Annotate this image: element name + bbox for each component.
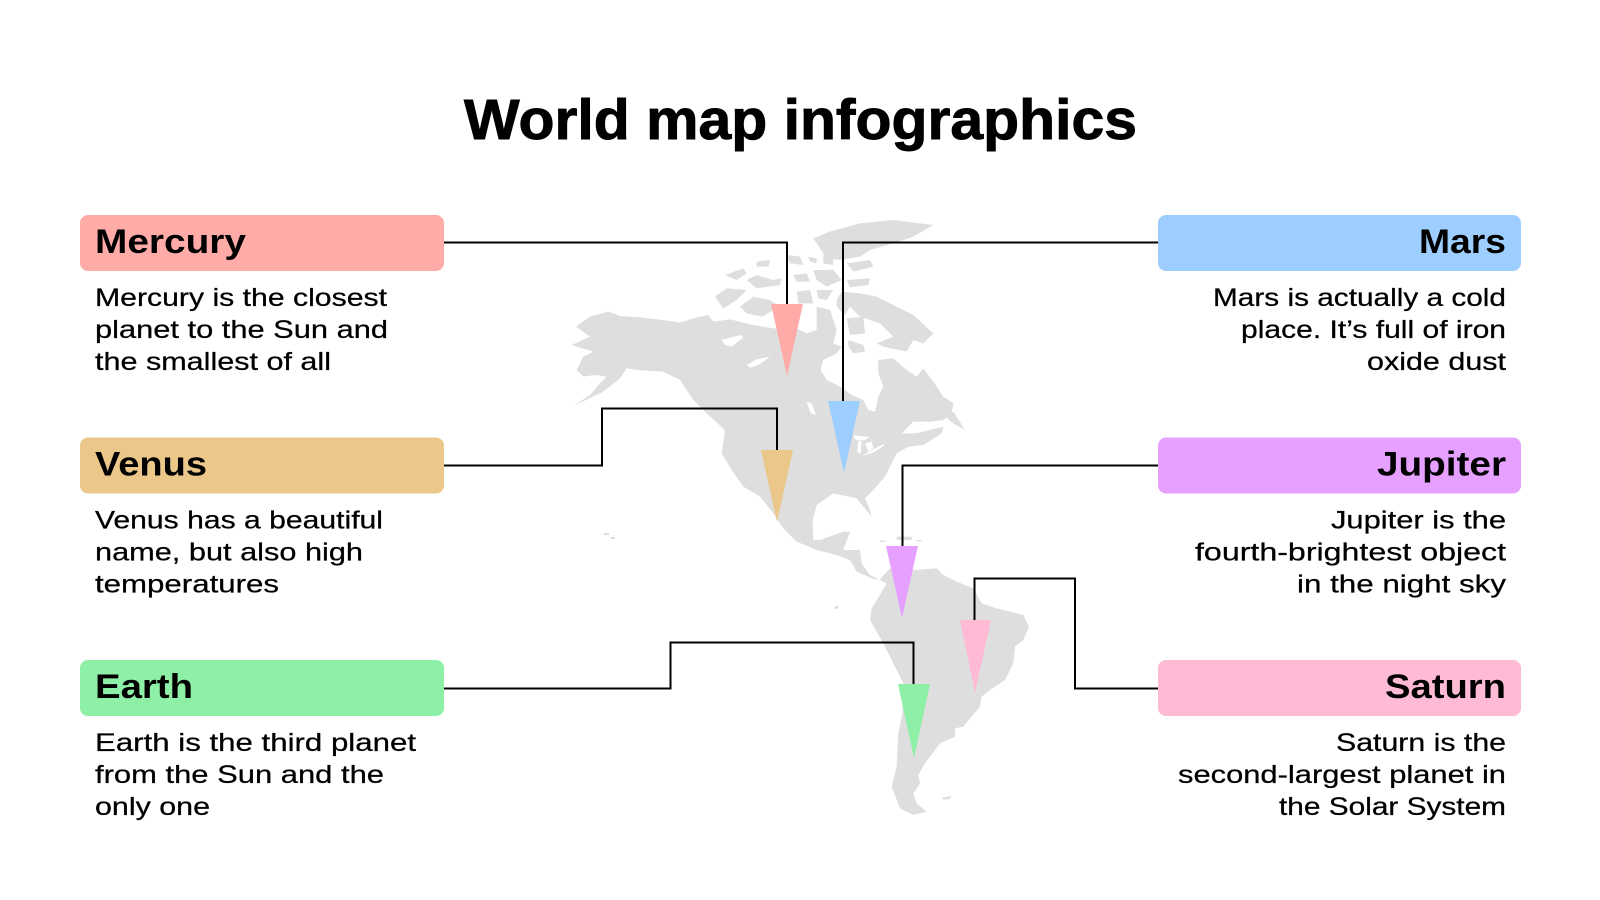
heading: Jupiter xyxy=(1377,446,1506,484)
connector: Jupiter xyxy=(902,466,1158,546)
marker: Earth xyxy=(898,684,930,758)
description: place. It’s full of iron xyxy=(1241,316,1506,344)
description: Jupiter is the xyxy=(1331,506,1506,534)
description xyxy=(95,729,416,821)
lakes and inland water xyxy=(722,335,885,456)
panel: Saturn xyxy=(1158,660,1521,821)
description: oxide dust xyxy=(1367,348,1506,376)
panel: Mars xyxy=(1158,215,1521,376)
title: World map infographics xyxy=(464,88,1137,152)
description xyxy=(1178,729,1506,821)
label bar xyxy=(80,660,444,716)
description: Venus has a beautiful xyxy=(95,506,383,534)
description: fourth-brightest object xyxy=(1195,538,1506,566)
description: Mars is actually a cold xyxy=(1213,284,1506,312)
description xyxy=(95,284,388,376)
description: in the night sky xyxy=(1297,570,1507,598)
description: Earth is the third planet xyxy=(95,729,416,757)
description: planet to the Sun and xyxy=(95,316,388,344)
marker: Saturn xyxy=(960,620,991,693)
description xyxy=(95,506,383,598)
panel: Mercury xyxy=(80,215,444,376)
marker: Mercury xyxy=(771,304,803,376)
connector: Mercury xyxy=(444,242,787,304)
description: the Solar System xyxy=(1279,793,1506,821)
marker: Venus xyxy=(761,450,793,522)
North America xyxy=(572,220,965,580)
label bar xyxy=(80,438,444,494)
South America and Caribbean xyxy=(870,537,1029,815)
map: North and South America xyxy=(572,220,1029,815)
marker: Mars xyxy=(828,401,860,473)
panel: Jupiter xyxy=(1158,438,1521,598)
connector: Venus xyxy=(444,408,777,466)
heading: Mercury xyxy=(95,223,246,261)
description: only one xyxy=(95,793,210,821)
description: Saturn is the xyxy=(1336,729,1506,757)
heading: Earth xyxy=(95,668,193,706)
label bar xyxy=(80,215,444,271)
description xyxy=(1195,506,1507,598)
label bar xyxy=(1158,215,1521,271)
connector: Saturn xyxy=(974,578,1158,688)
heading: Mars xyxy=(1419,223,1506,261)
description: Mercury is the closest xyxy=(95,284,387,312)
description: second-largest planet in xyxy=(1178,761,1506,789)
panel: Venus xyxy=(80,438,444,598)
description: temperatures xyxy=(95,570,279,598)
connector: Earth xyxy=(444,642,914,688)
label bar xyxy=(1158,438,1521,494)
marker: Jupiter xyxy=(886,546,918,618)
Pacific islands xyxy=(604,533,838,609)
description: from the Sun and the xyxy=(95,761,384,789)
panel: Earth xyxy=(80,660,444,821)
heading: Venus xyxy=(95,446,207,484)
heading: Saturn xyxy=(1385,668,1506,706)
description xyxy=(1213,284,1506,376)
label bar xyxy=(1158,660,1521,716)
description: the smallest of all xyxy=(95,348,331,376)
connector: Mars xyxy=(843,242,1158,401)
description: name, but also high xyxy=(95,538,363,566)
